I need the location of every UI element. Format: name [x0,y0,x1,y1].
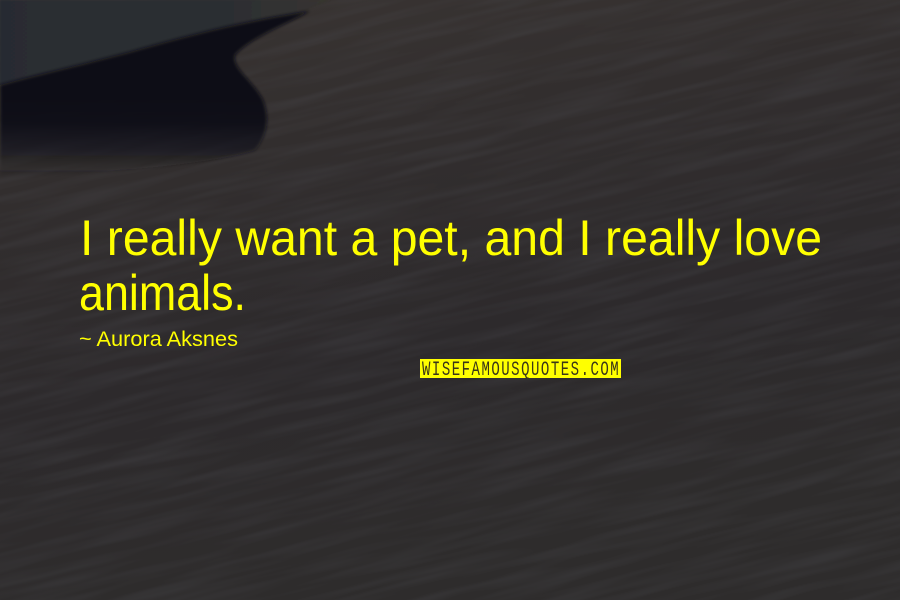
quote text [79,210,822,321]
badge background [420,359,621,378]
quote line 1: I really want a pet, and I really love [80,210,822,266]
author attribution: ~ Aurora Aksnes [79,328,238,351]
watermark badge [420,359,621,382]
quote line 2: animals. [79,265,246,321]
badge text: WISEFAMOUSQUOTES.COM [422,360,619,382]
background: dune shadow [0,11,310,178]
background: sky [0,0,330,85]
